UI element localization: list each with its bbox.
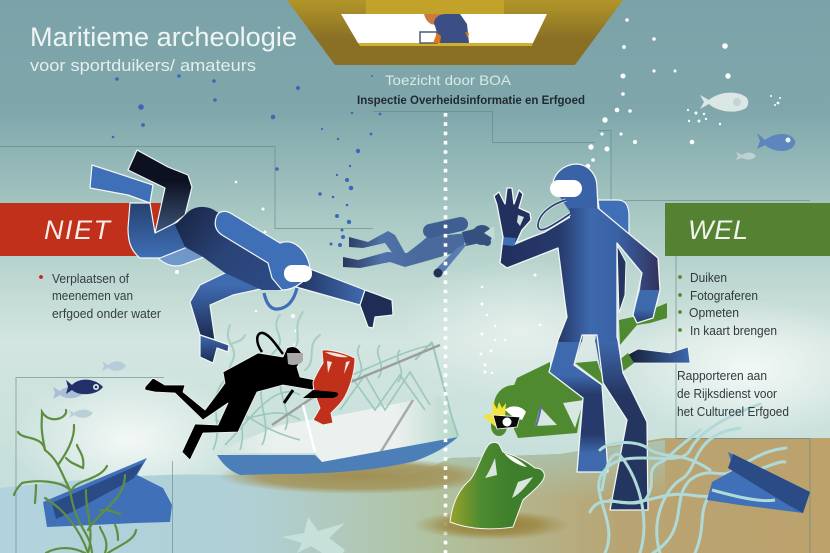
panel: WEL banner bbox=[665, 203, 830, 256]
diver silhouette bbox=[145, 347, 315, 460]
regulator hose bbox=[264, 288, 297, 309]
starfish bbox=[282, 517, 345, 553]
green seaweed, left bbox=[14, 410, 136, 553]
tank bbox=[430, 224, 461, 231]
reporting note bbox=[677, 369, 789, 419]
torso bbox=[510, 362, 583, 438]
far black fin and leg bbox=[128, 150, 192, 233]
green amphora bbox=[414, 442, 570, 540]
left arm bbox=[190, 265, 282, 340]
gloved hand on amphora bbox=[303, 390, 338, 398]
subtitle: voor sportduikers/ amateurs bbox=[30, 57, 256, 75]
NIET list bbox=[39, 272, 161, 321]
sunken boat bbox=[213, 342, 458, 475]
white body outline bbox=[494, 164, 660, 510]
camera bbox=[493, 415, 520, 429]
white mask bbox=[505, 406, 526, 420]
grey mask bbox=[287, 353, 303, 365]
panel: NIET banner: NIET bbox=[44, 215, 112, 245]
ok-sign hole bbox=[517, 215, 524, 226]
blue fin bbox=[90, 165, 153, 203]
large diver with OK sign (WEL) bbox=[494, 164, 660, 510]
torso and arms bbox=[500, 208, 660, 342]
title: Maritieme archeologie bbox=[30, 22, 297, 52]
arm bbox=[435, 243, 468, 273]
right handle gap bbox=[512, 477, 533, 498]
arm gap bbox=[535, 407, 557, 426]
WEL list: In kaart brengen bbox=[690, 324, 777, 338]
NIET list: meenemen van bbox=[52, 289, 133, 303]
sand shadow bbox=[414, 510, 570, 540]
white fish bbox=[700, 93, 748, 112]
blue hull band bbox=[217, 437, 458, 475]
reporting note: de Rijksdienst voor bbox=[677, 387, 777, 401]
chin bbox=[491, 416, 507, 436]
white mask bbox=[284, 265, 312, 282]
hood bbox=[494, 385, 534, 425]
green upper fin bbox=[619, 303, 667, 345]
front leg bbox=[549, 340, 608, 472]
tank and head bbox=[215, 211, 310, 290]
white window bbox=[341, 14, 547, 43]
inspection agency label: Inspectie Overheidsinformatie en Erfgoed bbox=[357, 95, 585, 107]
small grey fish bbox=[736, 152, 756, 160]
net on boat bbox=[213, 345, 432, 450]
head bbox=[553, 164, 598, 212]
red amphora bbox=[303, 350, 355, 425]
navy fish bbox=[66, 380, 103, 394]
inspector's gold hatch bbox=[287, 0, 623, 65]
regulator hose bbox=[538, 200, 570, 230]
regulator loop bbox=[257, 333, 283, 354]
right glove bbox=[360, 290, 393, 328]
navy strap sliver bbox=[617, 245, 626, 313]
head bbox=[472, 225, 495, 246]
blue bubbles bbox=[112, 74, 381, 247]
dark fin bbox=[627, 347, 690, 363]
panel: NIET banner bbox=[0, 203, 162, 256]
green lower leg bbox=[575, 361, 605, 386]
blue fin on sea floor, right bbox=[707, 452, 810, 513]
right forearm glove bbox=[633, 290, 660, 323]
seaweed behind black diver bbox=[225, 312, 320, 395]
forearm cuff bbox=[503, 237, 516, 246]
white dotted divider bbox=[444, 113, 447, 553]
tank bbox=[598, 200, 629, 236]
black diver taking the amphora bbox=[145, 333, 315, 460]
WEL list: Opmeten bbox=[689, 306, 739, 320]
small distant diver bbox=[343, 224, 495, 278]
thigh highlight bbox=[155, 245, 204, 266]
reporting note: Rapporteren aan bbox=[677, 369, 767, 383]
blue fin on sea floor, left bbox=[43, 458, 172, 527]
amphora opening bbox=[504, 453, 527, 467]
NIET list: Verplaatsen of bbox=[52, 272, 130, 286]
amphora body bbox=[450, 442, 544, 529]
camera flash bbox=[483, 400, 506, 428]
panel: WEL banner: WEL bbox=[688, 215, 748, 245]
pale seaweed foreground right bbox=[590, 404, 786, 553]
right arm bbox=[296, 269, 365, 305]
hand bbox=[434, 268, 442, 278]
back leg bbox=[595, 340, 648, 510]
torso bbox=[175, 207, 290, 290]
green diver with camera bbox=[483, 303, 690, 438]
supervision label: Toezicht door BOA bbox=[385, 72, 512, 88]
fish near seaweed, pale bbox=[102, 361, 126, 371]
WEL list: Duiken bbox=[690, 271, 727, 285]
diver reaching out (NIET) bbox=[90, 150, 393, 363]
blue leg bbox=[128, 203, 205, 258]
OK hand bbox=[494, 188, 531, 243]
boat hull bbox=[213, 395, 458, 462]
upper leg and fin bbox=[349, 231, 405, 254]
blue fish bbox=[757, 133, 795, 151]
reporting note: het Cultureel Erfgoed bbox=[677, 405, 789, 419]
WEL list bbox=[678, 271, 777, 338]
boat mast poles bbox=[272, 345, 440, 425]
thin frame lines bbox=[0, 112, 810, 553]
WEL list: Fotograferen bbox=[690, 289, 758, 303]
tube bbox=[284, 390, 293, 403]
left handle gap bbox=[485, 458, 497, 478]
lower leg and fin bbox=[343, 233, 468, 268]
NIET list: erfgoed onder water bbox=[52, 307, 161, 321]
neck bbox=[462, 228, 480, 246]
white bubbles bbox=[175, 18, 781, 374]
white mask bbox=[550, 180, 582, 197]
left hand bbox=[200, 335, 229, 363]
inspector at laptop bbox=[420, 14, 469, 43]
mast triangle bbox=[432, 342, 458, 436]
